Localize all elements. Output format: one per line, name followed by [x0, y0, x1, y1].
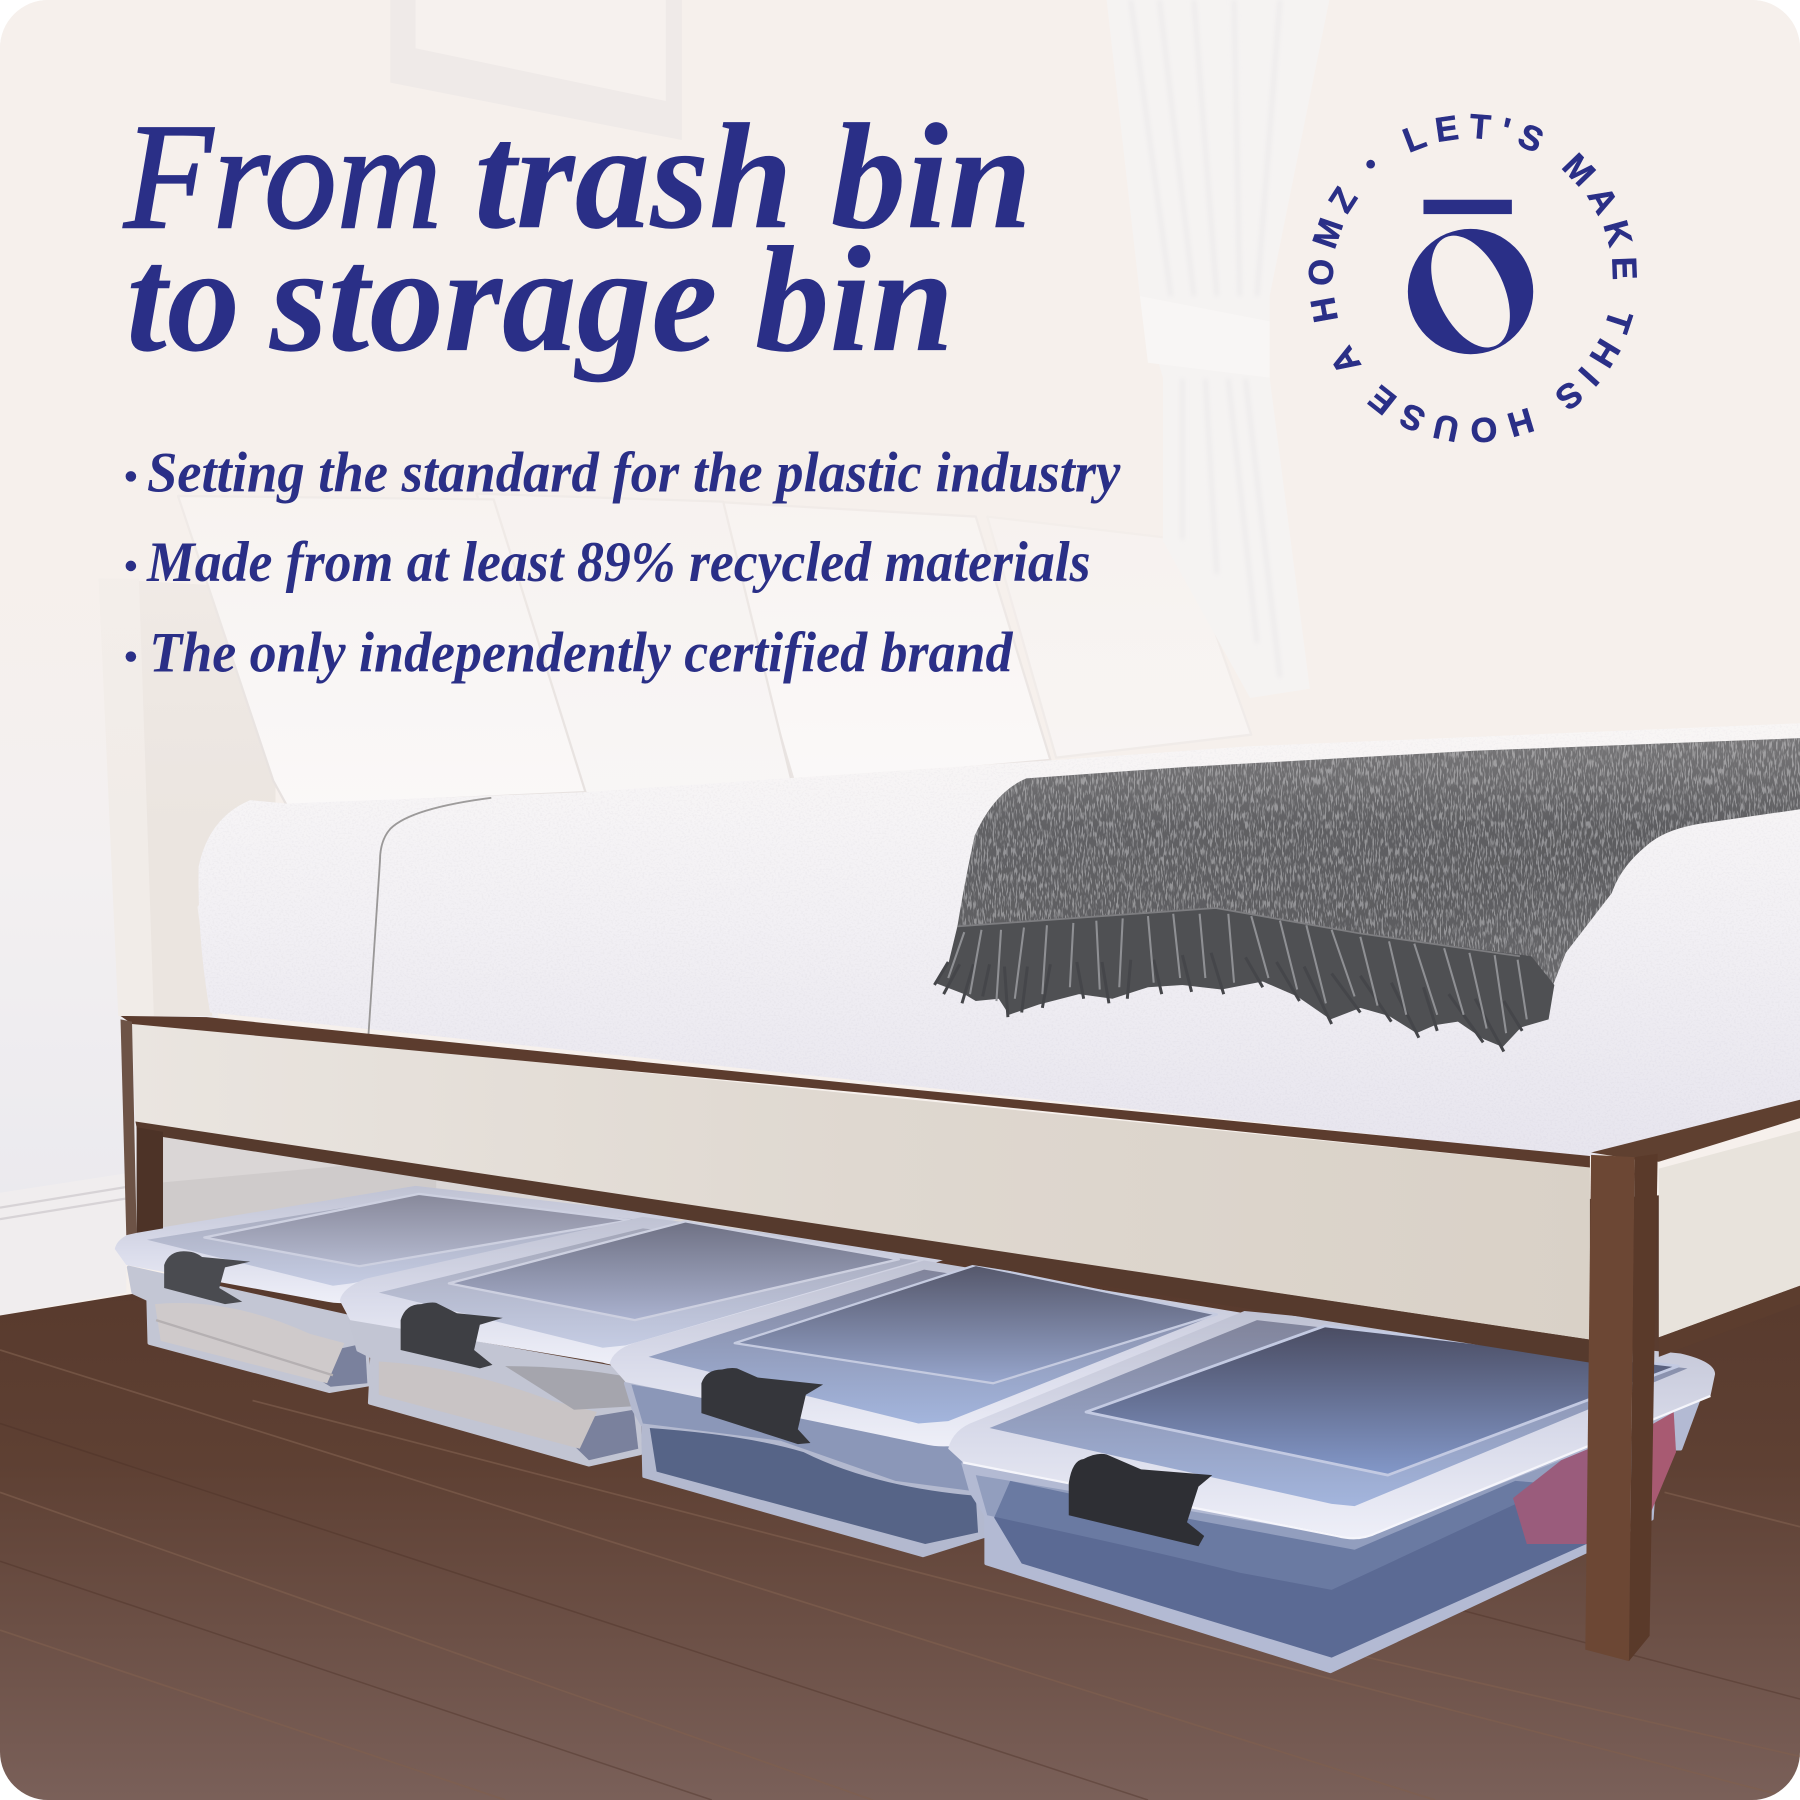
bottom wood trim	[135, 1122, 1590, 1363]
right side panel	[1659, 1131, 1800, 1337]
storage bin 3	[610, 1260, 1251, 1555]
throw fabric	[957, 738, 1800, 1008]
top wood trim	[121, 1016, 1590, 1167]
bin 4 lid	[948, 1311, 1715, 1538]
curtain	[1107, 0, 1329, 698]
round brand badge	[1308, 114, 1637, 442]
bin 3 clasp	[701, 1368, 823, 1444]
headboard	[99, 579, 276, 1016]
throw speckle	[957, 738, 1800, 1008]
headline: trash bin	[474, 92, 1032, 260]
grey throw blanket	[934, 738, 1800, 1052]
headline: to	[126, 215, 240, 383]
headline	[123, 92, 1032, 383]
circular slogan: LET'S MAKE THIS HOUSE A HOMZ	[1308, 114, 1637, 442]
throw fringe	[934, 908, 1554, 1047]
storage bin 1	[115, 1186, 689, 1391]
logo bar	[1423, 200, 1512, 214]
bullet 2: Made from at least 89% recycled materials	[146, 531, 1091, 594]
storage bin 4	[948, 1311, 1715, 1671]
bin 2 lid	[340, 1217, 953, 1365]
bin 4 body	[963, 1396, 1700, 1671]
bin 4 blue clothes	[994, 1481, 1586, 1658]
headline: storage bin	[269, 215, 954, 383]
bullet 1: Setting the standard for the plastic industry	[147, 441, 1121, 504]
bullet list	[126, 441, 1121, 685]
mattress with white coverlet	[199, 723, 1800, 1157]
pillows	[178, 494, 1251, 806]
bin 2 body	[350, 1320, 641, 1465]
wall background	[0, 534, 1800, 1314]
bin 3 lid	[610, 1260, 1251, 1446]
bullet 3: The only independently certified brand	[149, 622, 1014, 685]
headline: From	[123, 92, 442, 260]
upholstered side panel	[132, 1022, 1590, 1340]
bin 1 body	[129, 1267, 370, 1391]
logo ring	[1408, 229, 1533, 354]
bin 3 blue clothes	[650, 1428, 978, 1544]
left leg	[121, 1019, 163, 1235]
bed frame rail	[121, 1016, 1800, 1661]
bin 1 folded clothes	[155, 1303, 344, 1383]
bin 3 body	[626, 1383, 985, 1555]
storage bin 2	[340, 1217, 953, 1465]
bin 1 lid	[115, 1186, 689, 1303]
under-bed wall and baseboard	[0, 1137, 778, 1234]
bin 2 clasp	[401, 1303, 503, 1368]
right leg	[1585, 1155, 1635, 1661]
bin 1 clasp	[164, 1251, 250, 1304]
bin 4 red clothes	[1513, 1449, 1589, 1544]
wood floor	[0, 1188, 1800, 1800]
bin 2 folded clothes	[379, 1361, 597, 1449]
soft light wash over upper photo	[0, 0, 1800, 827]
wall picture frame	[390, 0, 682, 140]
bin 4 clasp	[1069, 1454, 1212, 1546]
